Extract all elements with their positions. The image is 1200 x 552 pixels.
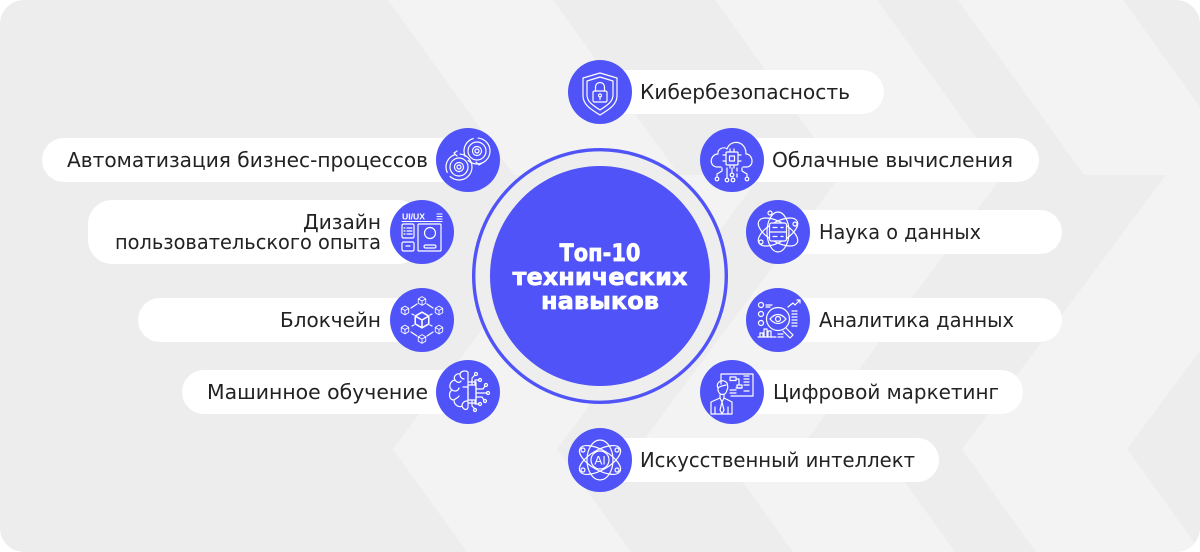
pill <box>138 298 422 342</box>
icon: gears <box>436 128 500 192</box>
pill <box>42 138 468 182</box>
label: Блокчейн <box>280 308 381 332</box>
skill: machine learning <box>182 360 500 424</box>
skill: business process automation <box>42 128 500 192</box>
skill: data science <box>746 200 1062 264</box>
label: Кибербезопасность <box>640 80 850 104</box>
icon: presenter and board <box>700 360 764 424</box>
label: пользовательского опыта <box>115 230 381 254</box>
skill: digital marketing <box>700 360 1023 424</box>
skill: cloud computing <box>700 128 1039 192</box>
inner circle <box>490 166 710 386</box>
icon: UI/UX layout: UI/UX <box>402 212 426 222</box>
skill: data analytics <box>746 288 1062 352</box>
icon: cube network <box>390 288 454 352</box>
pill <box>182 370 468 414</box>
pill <box>778 298 1062 342</box>
icon: atom with database <box>746 200 810 264</box>
skill: UX design <box>88 200 454 264</box>
central hub <box>474 150 726 402</box>
icon: AI atom: AI <box>594 454 606 468</box>
skill: cybersecurity <box>568 60 884 124</box>
skill: blockchain <box>138 288 454 352</box>
title: технических <box>512 263 688 291</box>
pill <box>732 370 1023 414</box>
pill <box>778 210 1062 254</box>
label: Машинное обучение <box>207 380 428 404</box>
label: Цифровой маркетинг <box>773 380 999 404</box>
label: Облачные вычисления <box>772 148 1013 172</box>
label: Автоматизация бизнес-процессов <box>67 148 428 172</box>
icon: magnifier with eye <box>746 288 810 352</box>
icon: AI atom <box>568 428 632 492</box>
icon: shield with lock <box>568 60 632 124</box>
label: Дизайн <box>303 210 381 234</box>
icon: UI/UX layout <box>390 200 454 264</box>
label: Аналитика данных <box>819 308 1014 332</box>
title: Топ-10 <box>560 239 640 267</box>
icon: brain with circuit <box>436 360 500 424</box>
pill <box>600 70 884 114</box>
icon: cloud chip <box>700 128 764 192</box>
skill: artificial intelligence <box>568 428 939 492</box>
pill <box>88 200 422 264</box>
label: Наука о данных <box>819 220 981 244</box>
label: Искусственный интеллект <box>640 448 915 472</box>
title: навыков <box>541 287 659 315</box>
pill <box>600 438 939 482</box>
pill <box>732 138 1039 182</box>
outer ring <box>474 150 726 402</box>
